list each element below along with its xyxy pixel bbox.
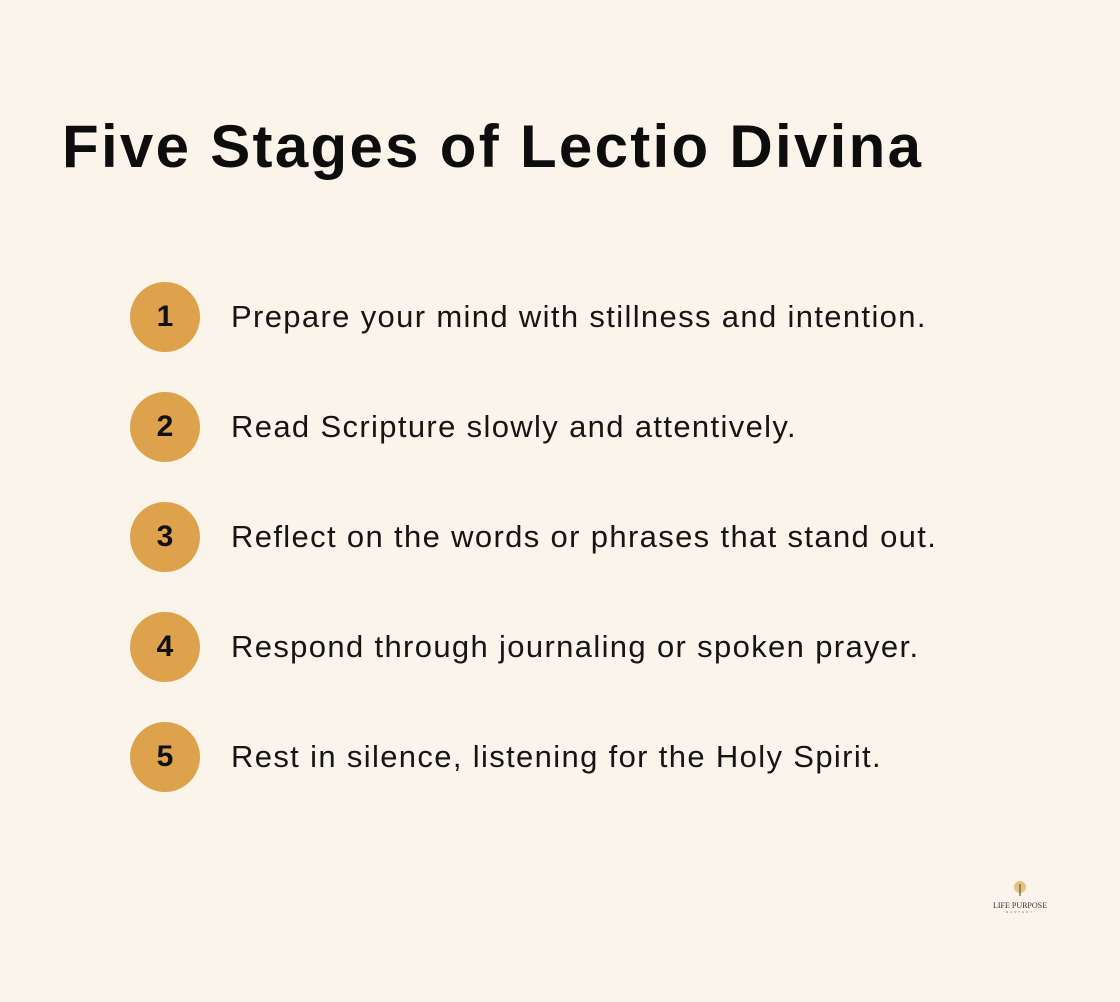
step 4 (130, 612, 919, 682)
step 1: 1 (157, 300, 173, 333)
step 5 (130, 722, 882, 792)
step 3: Reflect on the words or phrases that stand out. (231, 519, 937, 554)
step 4: Respond through journaling or spoken prayer. (231, 629, 919, 664)
step 4: 4 (157, 630, 173, 663)
step 2: Read Scripture slowly and attentively. (231, 409, 797, 444)
logo (993, 881, 1047, 914)
step 5: 5 (157, 740, 173, 773)
step 3 (130, 502, 937, 572)
title: Five Stages of Lectio Divina (62, 113, 923, 180)
step 3: 3 (157, 520, 173, 553)
step 5: Rest in silence, listening for the Holy Spirit. (231, 739, 882, 774)
logo: MASTERY (1006, 910, 1034, 914)
step 2: 2 (157, 410, 173, 443)
logo: LIFE PURPOSE (993, 901, 1047, 910)
step 1: Prepare your mind with stillness and intention. (231, 299, 927, 334)
step 1 (130, 282, 927, 352)
step 2 (130, 392, 797, 462)
